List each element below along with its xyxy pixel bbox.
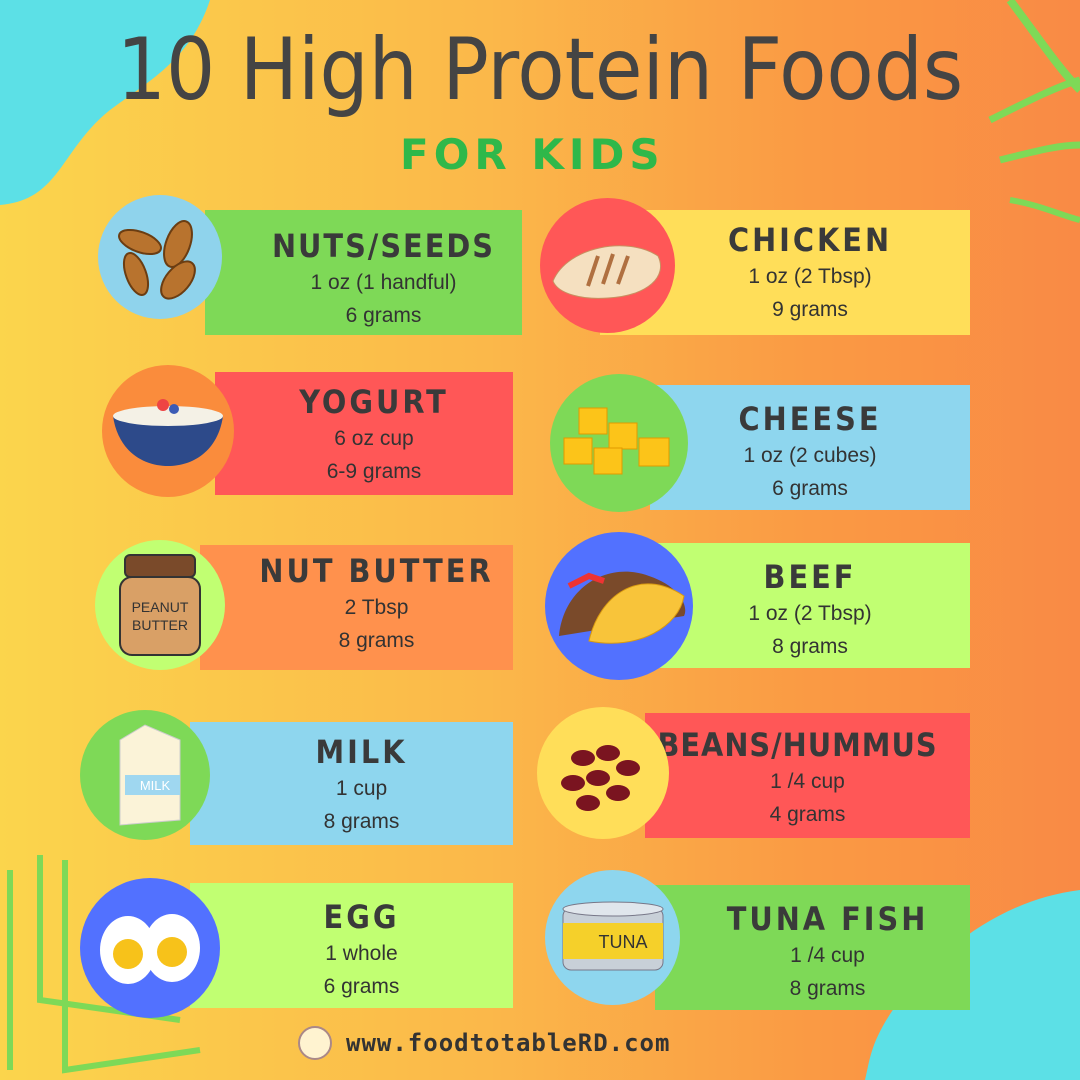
icon: tuna can [545,870,680,1005]
icon: eggs [80,878,220,1018]
icon: taco [545,532,693,680]
card: tuna fish [655,885,970,1010]
card: chicken: 1 oz (2 Tbsp) [748,265,872,288]
card: yogurt: 6-9 grams [327,460,421,483]
icon: milk carton [80,710,210,840]
card: yogurt: YOGURT [299,383,449,421]
icon: yogurt bowl [102,365,234,497]
card: milk [190,722,513,845]
card: cheese: CHEESE [739,400,881,438]
card: egg [190,883,513,1008]
card: milk: 1 cup [336,777,387,800]
card: yogurt: 6 oz cup [334,427,414,450]
card: nuts/seeds: NUTS/SEEDS [272,227,495,265]
title: 10 High Protein Foods [117,20,963,120]
card: chicken: 9 grams [772,298,848,321]
card: nuts/seeds: 1 oz (1 handful) [311,271,456,294]
card: cheese: 1 oz (2 cubes) [743,444,877,467]
icon: beans [537,707,669,839]
card: egg: EGG [324,898,399,936]
card: tuna fish: 8 grams [790,977,865,1000]
card: nut butter: NUT BUTTER [259,552,494,590]
card: tuna fish: TUNA FISH [727,900,928,938]
subtitle: FOR KIDS [400,130,665,179]
icon: cheese cubes [550,374,688,512]
card: cheese: 6 grams [772,477,848,500]
card: beef: 8 grams [772,635,848,658]
icon: peanut butter jar: BUTTER [132,617,188,633]
icon: chicken breast [540,198,675,333]
card: nut butter [200,545,513,670]
card: beans/hummus: BEANS/HUMMUS [657,726,938,764]
icon: peanut butter jar: PEANUT [132,599,189,615]
card: nut butter: 8 grams [339,629,414,652]
icon: tuna can: TUNA [598,932,647,952]
card: egg: 1 whole [325,942,398,965]
card: beef [650,543,970,668]
card: cheese [650,385,970,510]
card: milk: MILK [315,733,408,771]
icon: peanut butter jar [95,540,225,670]
card: beans/hummus: 1 /4 cup [770,770,845,793]
card: beans/hummus: 4 grams [770,803,845,826]
card: nuts/seeds [205,210,522,335]
footer: website: www.foodtotableRD.com [346,1029,670,1057]
card: nut butter: 2 Tbsp [345,596,408,619]
card: milk: 8 grams [324,810,399,833]
card: chicken: CHICKEN [728,221,892,259]
card: yogurt [215,372,513,495]
icon: almonds [98,195,222,319]
card: nuts/seeds: 6 grams [346,304,421,327]
card: beef: BEEF [764,558,856,596]
icon: logo [298,1026,332,1060]
card: tuna fish: 1 /4 cup [790,944,865,967]
card: egg: 6 grams [324,975,399,998]
card: beef: 1 oz (2 Tbsp) [748,602,872,625]
card: beans/hummus [645,713,970,838]
card: chicken [600,210,970,335]
icon: milk carton: MILK [140,778,170,793]
